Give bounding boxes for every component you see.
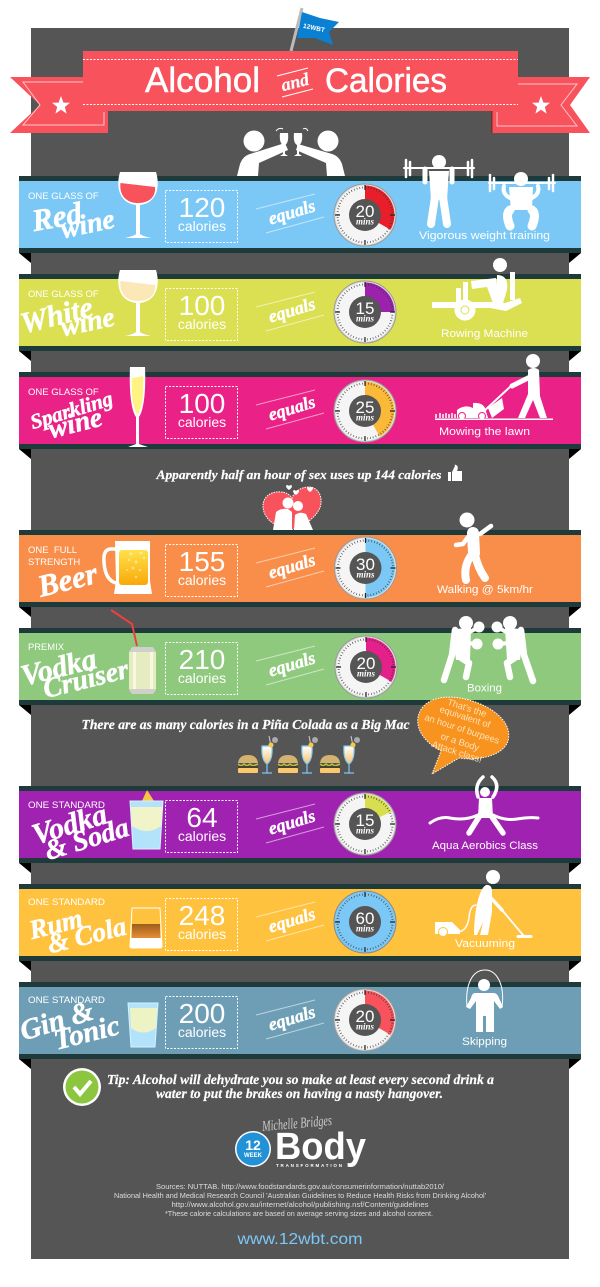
timer: 15 mins: 15 — [356, 811, 374, 830]
band: rum and cola — [19, 870, 581, 971]
icon: red wine glass — [118, 172, 158, 238]
tip text: Tip: Alcohol will dehydrate you so make at least every second drink a — [107, 1073, 494, 1088]
icon: green check — [63, 1068, 101, 1106]
band: red wine — [19, 155, 581, 263]
icon: vacuuming — [435, 870, 531, 936]
sources — [114, 1182, 487, 1218]
drink label: ONE STANDARD — [28, 995, 105, 1006]
timer: 20 mins — [335, 636, 397, 698]
icon: can with straw — [111, 610, 156, 694]
callout: speech bubble — [418, 697, 509, 774]
drink label: & Soda — [41, 812, 133, 867]
drink label — [17, 642, 133, 705]
calories box — [166, 898, 238, 950]
drink label — [16, 995, 123, 1057]
calories box: calories — [178, 572, 226, 588]
timer: 20 mins: mins — [357, 668, 375, 678]
title banner — [10, 51, 590, 133]
timer: 25 mins — [334, 380, 396, 442]
drink label: Gin & — [16, 995, 98, 1047]
icon: two people toasting — [237, 128, 345, 176]
drink label: ONE GLASS OF — [28, 387, 99, 398]
timer: 20 mins — [334, 989, 396, 1051]
timer: 15 mins — [334, 793, 396, 855]
callout: speech bubble: or a Body — [440, 731, 481, 753]
drink label: ONE GLASS OF — [28, 191, 99, 202]
timer: 60 mins: mins — [356, 924, 374, 934]
icon: mowing the lawn — [435, 354, 553, 420]
icon: vodka glass with lemon — [130, 790, 163, 849]
activity label: Boxing — [467, 682, 502, 694]
calories box: 248 — [179, 900, 225, 931]
calories box: 210 — [179, 644, 225, 675]
activity label: Mowing the lawn — [439, 426, 530, 438]
timer: 20 mins — [334, 184, 396, 246]
drink label: Sparkling — [27, 386, 116, 434]
timer: 20 mins: 20 — [356, 1007, 374, 1026]
activity label: Skipping — [462, 1036, 507, 1048]
drink label — [28, 798, 133, 867]
calories box: calories — [178, 414, 226, 430]
title text: Alcohol — [145, 61, 260, 100]
callout: pina colada: There are as many calories in a Piña Colada as a Big Mac — [82, 718, 410, 733]
activity label: Walking @ 5km/hr — [437, 584, 533, 596]
drink label: Rum — [25, 903, 86, 945]
band: white wine — [17, 258, 581, 361]
band: gin and tonic — [16, 970, 581, 1069]
equals: equals — [266, 293, 318, 327]
activity label: Aqua Aerobics Class — [432, 840, 539, 852]
calories box: 155 — [179, 546, 225, 577]
calories box — [166, 800, 238, 852]
website url: www.12wbt.com — [236, 1231, 362, 1248]
sources: http://www.alcohol.gov.au/internet/alcohol/publishing.nsf/Content/guidelines — [172, 1200, 429, 1209]
icon: weight training — [404, 155, 555, 226]
icon: burgers and pina coladas — [238, 736, 360, 773]
callout: speech bubble: equivalent of — [438, 704, 492, 730]
timer: 20 mins: 20 — [357, 654, 375, 673]
logo: 12 Week Body Transformation: Body — [275, 1126, 366, 1168]
drink label: ONE GLASS OF — [28, 289, 99, 300]
logo: 12 Week Body Transformation — [235, 1113, 366, 1168]
logo: 12 Week Body Transformation: Michelle Bridges — [261, 1113, 333, 1135]
equals: equals — [266, 903, 318, 937]
equals — [256, 646, 324, 685]
drink label: wine — [45, 402, 106, 445]
right ribbon tail — [491, 77, 590, 133]
icon: aqua aerobics — [430, 777, 538, 833]
drink label: & Cola — [44, 911, 129, 959]
icon: 12WBT flag — [291, 8, 339, 51]
calories box: calories — [178, 670, 226, 686]
timer: 15 mins — [334, 281, 396, 343]
timer: 15 mins: 15 — [356, 299, 374, 318]
calories box: calories — [178, 1024, 226, 1040]
timer: 20 mins: mins — [356, 216, 374, 226]
icon: walking — [456, 512, 491, 580]
drink label: Beer — [33, 555, 102, 604]
drink label: wine — [58, 302, 118, 343]
timer: 15 mins: mins — [356, 314, 374, 324]
drink label: STRENGTH — [28, 557, 80, 568]
equals — [256, 902, 324, 941]
equals — [256, 1000, 324, 1039]
timer: 20 mins: mins — [356, 1022, 374, 1032]
band: sparkling wine — [19, 354, 581, 459]
timer: 60 mins: 60 — [356, 909, 374, 928]
icon: rum glass — [130, 908, 162, 948]
title text — [145, 61, 447, 100]
drink label: ONE STANDARD — [28, 897, 105, 908]
title text: and — [279, 69, 312, 95]
icon: couple in heart — [263, 485, 321, 530]
calories box: 64 — [186, 802, 218, 833]
band: vodka cruiser — [17, 610, 581, 715]
icon: skipping rope — [466, 970, 503, 1032]
calories box: 100 — [179, 290, 225, 321]
activity label: Vigorous weight training — [419, 230, 550, 242]
logo: 12 Week Body Transformation: 12 — [245, 1137, 261, 1153]
activity label: Vacuuming — [455, 938, 515, 950]
icon: 12WBT flag: 12WBT — [302, 23, 325, 34]
calories box: 100 — [179, 388, 225, 419]
calories box — [166, 288, 238, 340]
calories box: 120 — [179, 192, 225, 223]
timer: 25 mins: mins — [356, 412, 374, 422]
icon: boxers — [444, 616, 533, 681]
drink label: PREMIX — [28, 642, 65, 653]
band: beer — [19, 512, 581, 617]
band: vodka and soda — [19, 777, 581, 873]
callout: speech bubble: an hour of burpees — [423, 712, 501, 746]
drink label: ONE FULL — [28, 545, 77, 556]
timer: 20 mins: 20 — [356, 202, 374, 221]
timer: 30 mins: 30 — [356, 555, 375, 574]
equals: equals — [266, 195, 318, 229]
logo: 12 Week Body Transformation: TRANSFORMATION — [276, 1163, 342, 1168]
main ribbon — [83, 51, 518, 111]
equals — [256, 804, 324, 843]
logo: 12 Week Body Transformation: WEEK — [244, 1153, 263, 1159]
equals — [256, 292, 324, 331]
drink label: wine — [58, 204, 118, 245]
tip text: water to put the brakes on having a nasty hangover. — [156, 1087, 443, 1102]
calories box: 200 — [179, 998, 225, 1029]
drink label: Cruiser — [40, 654, 133, 705]
equals — [256, 390, 324, 429]
calories box — [166, 544, 238, 596]
equals — [256, 194, 324, 233]
timer: 15 mins: mins — [356, 826, 374, 836]
activity label: Rowing Machine — [441, 328, 528, 340]
callout: sex calories: Apparently half an hour of sex uses up 144 calories — [155, 467, 442, 482]
calories box — [166, 190, 238, 242]
callout: speech bubble: Attack class! — [431, 739, 483, 765]
icon: thumbs up — [448, 465, 462, 481]
sources: *These calorie calculations are based on average serving sizes and alcohol content. — [165, 1209, 433, 1218]
icon: beer mug — [104, 541, 152, 594]
equals: equals — [266, 805, 318, 839]
callout: speech bubble: That's the — [446, 697, 488, 719]
sources: Sources: NUTTAB. http://www.foodstandards.gov.au/consumerinformation/nuttab2010/ — [156, 1182, 445, 1191]
drink label — [25, 897, 129, 959]
timer: 30 mins — [334, 537, 396, 599]
left ribbon tail — [10, 77, 108, 133]
timer: 30 mins: mins — [356, 570, 375, 580]
calories box — [166, 386, 238, 438]
icon: rowing machine — [432, 258, 522, 320]
calories box — [166, 642, 238, 694]
calories box: calories — [178, 828, 226, 844]
equals: equals — [266, 647, 318, 681]
sources: National Health and Medical Research Council 'Australian Guidelines to Reduce Health Risks from Drinking Alcohol' — [114, 1191, 487, 1200]
equals: equals — [266, 391, 318, 425]
drink label: Vodka — [17, 642, 100, 693]
drink label: ONE STANDARD — [28, 800, 105, 811]
calories box: calories — [178, 926, 226, 942]
calories box: calories — [178, 316, 226, 332]
drink label — [28, 191, 118, 245]
equals: equals — [266, 549, 318, 583]
calories box: calories — [178, 218, 226, 234]
icon: white wine glass — [118, 270, 158, 336]
timer: 25 mins: 25 — [356, 398, 374, 417]
drink label: Red — [28, 195, 85, 238]
icon: champagne flute — [128, 367, 148, 447]
drink label: White — [17, 291, 96, 340]
drink label: Vodka — [28, 798, 111, 852]
tip text — [107, 1073, 494, 1102]
calories box — [166, 996, 238, 1048]
equals — [256, 548, 324, 587]
title text: Calories — [325, 62, 447, 100]
equals: equals — [266, 1001, 318, 1035]
drink label: Tonic — [51, 1009, 123, 1057]
timer: 60 mins — [334, 891, 396, 953]
icon: gin glass — [128, 1003, 158, 1047]
